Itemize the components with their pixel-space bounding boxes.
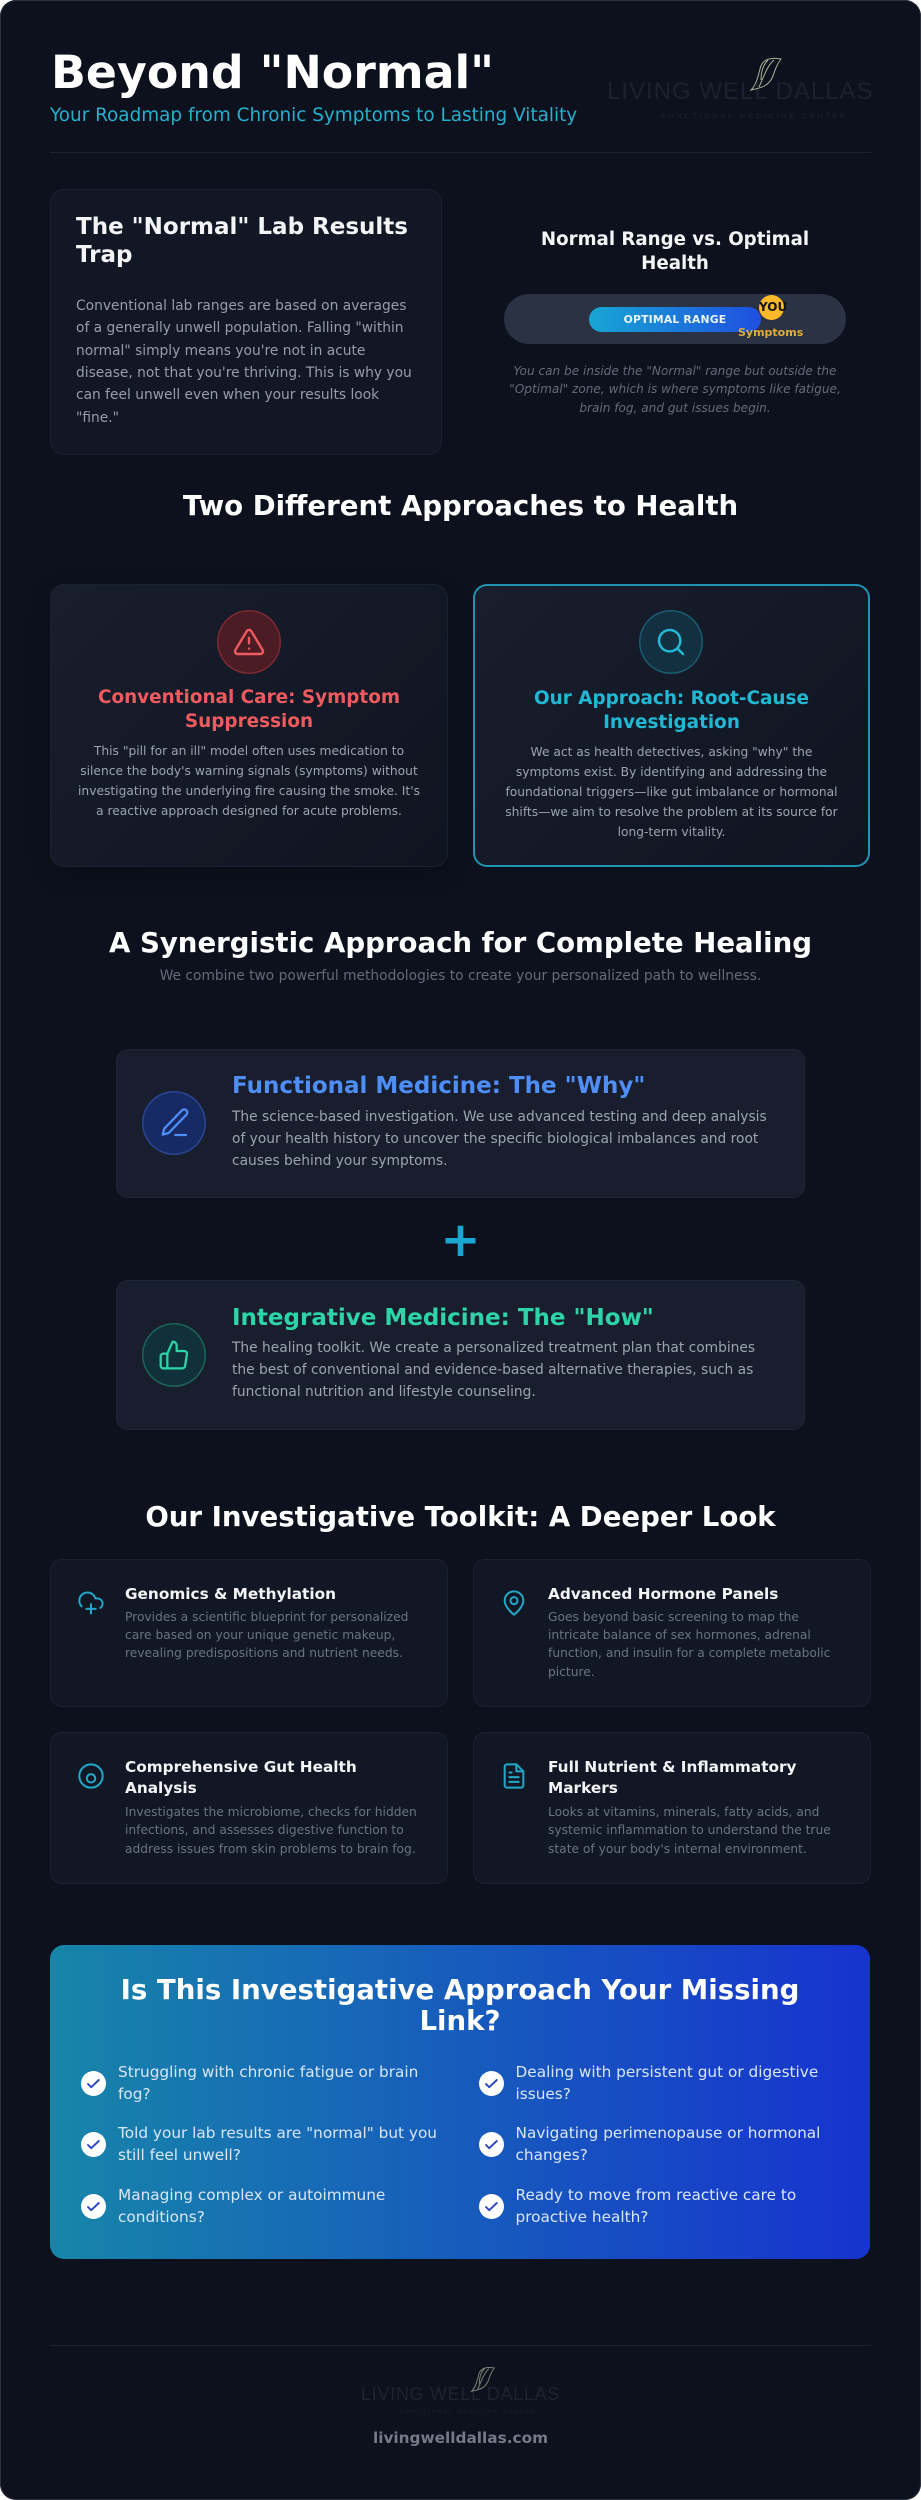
footer url: livingwelldallas.com bbox=[373, 2429, 548, 2447]
card text: revealing predispositions and nutrient needs. bbox=[125, 1646, 403, 1660]
card text: Goes beyond basic screening to map the bbox=[548, 1610, 799, 1624]
checklist item bbox=[81, 2124, 437, 2164]
panel: integrative medicine bbox=[116, 1280, 805, 1430]
panel body text: of a generally unwell population. Falling "within bbox=[76, 320, 404, 336]
heading: two approaches: Two Different Approaches to Health bbox=[183, 489, 738, 522]
card title: Comprehensive Gut Health bbox=[125, 1758, 357, 1776]
section title: A Synergistic Approach for Complete Healing bbox=[109, 926, 812, 959]
icon: target circle bbox=[78, 1763, 104, 1789]
icon: map pin bbox=[504, 1590, 524, 1616]
diagram caption: brain fog, and gut issues begin. bbox=[579, 401, 771, 415]
card text: Provides a scientific blueprint for personalized bbox=[125, 1610, 408, 1624]
panel body: functional nutrition and lifestyle counseling. bbox=[232, 1384, 536, 1400]
item text: Struggling with chronic fatigue or brain bbox=[118, 2063, 418, 2081]
panel body: causes behind your symptoms. bbox=[232, 1153, 448, 1169]
item text: Managing complex or autoimmune bbox=[118, 2186, 385, 2204]
panel heading: Trap bbox=[76, 242, 132, 268]
panel heading bbox=[76, 214, 408, 268]
card title bbox=[548, 1758, 797, 1797]
panel body text: Conventional lab ranges are based on averages bbox=[76, 298, 406, 314]
card text: function, and insulin for a complete metabolic bbox=[548, 1646, 830, 1660]
diagram caption: You can be inside the "Normal" range but outside the bbox=[514, 364, 836, 378]
panel: our approach bbox=[473, 584, 870, 867]
item text: changes? bbox=[516, 2146, 588, 2164]
card title: Genomics & Methylation bbox=[125, 1585, 336, 1603]
card body: a reactive approach designed for acute problems. bbox=[96, 804, 402, 818]
card heading: Suppression bbox=[185, 711, 313, 732]
card heading: Our Approach: Root-Cause bbox=[534, 688, 809, 709]
item text: issues? bbox=[516, 2085, 571, 2103]
card text: state of your body's internal environment. bbox=[548, 1842, 807, 1856]
item text: proactive health? bbox=[516, 2208, 648, 2226]
card body: investigating the underlying fire causing the smoke. It's bbox=[78, 784, 420, 798]
panel body bbox=[232, 1340, 755, 1400]
panel: normal vs optimal diagram bbox=[504, 228, 846, 415]
icon: check bbox=[479, 2071, 504, 2096]
panel: conventional care bbox=[50, 584, 448, 867]
card text: care based on your unique genetic makeup, bbox=[125, 1628, 395, 1642]
icon: magnifier bbox=[639, 610, 703, 674]
card text: systemic inflammation to understand the true bbox=[548, 1823, 831, 1837]
icon: leaf bbox=[749, 58, 782, 91]
checklist item bbox=[516, 2185, 856, 2229]
card text: Investigates the microbiome, checks for hidden bbox=[125, 1805, 417, 1819]
panel body text: "fine." bbox=[76, 410, 119, 426]
diagram heading bbox=[541, 228, 809, 274]
item text: fog? bbox=[118, 2085, 151, 2103]
checklist item bbox=[479, 2124, 820, 2164]
panel body: The healing toolkit. We create a personalized treatment plan that combines bbox=[232, 1340, 755, 1356]
icon: warning triangle bbox=[217, 610, 281, 674]
item text: Dealing with persistent gut or digestive bbox=[516, 2063, 818, 2081]
footer logo bbox=[360, 2368, 560, 2418]
card text: intricate balance of sex hormones, adrenal bbox=[548, 1628, 811, 1642]
card text: address issues from skin problems to brain fog. bbox=[125, 1842, 416, 1856]
panel heading: Integrative Medicine: The "How" bbox=[232, 1305, 654, 1331]
card title: Markers bbox=[548, 1779, 618, 1797]
header divider bbox=[50, 152, 871, 153]
card heading: Investigation bbox=[603, 712, 740, 733]
diagram caption: "Optimal" zone, which is where symptoms like fatigue, bbox=[509, 382, 841, 396]
header bbox=[50, 45, 874, 153]
item text bbox=[118, 2063, 418, 2103]
plus sign: + bbox=[440, 1212, 481, 1268]
icon: pen bbox=[142, 1091, 206, 1155]
checklist item bbox=[479, 2063, 818, 2103]
panel: functional medicine bbox=[116, 1049, 805, 1198]
logo tagline: FUNCTIONAL MEDICINE CENTER bbox=[661, 111, 848, 120]
icon: document bbox=[504, 1763, 524, 1789]
cta heading: Is This Investigative Approach Your Missing bbox=[121, 1973, 799, 2006]
diagram caption bbox=[509, 364, 841, 415]
card body: This "pill for an ill" model often uses medication to bbox=[94, 744, 404, 758]
card text bbox=[548, 1610, 830, 1679]
checklist item bbox=[81, 2186, 385, 2226]
card heading: Conventional Care: Symptom bbox=[98, 687, 400, 708]
icon: check bbox=[478, 2194, 504, 2218]
optimal range segment bbox=[589, 307, 761, 332]
icon: check bbox=[81, 2071, 106, 2096]
item text: Told your lab results are "normal" but you bbox=[118, 2124, 437, 2142]
panel body: of your health history to uncover the specific biological imbalances and root bbox=[232, 1131, 758, 1147]
heading: investigative toolkit: Our Investigative Toolkit: A Deeper Look bbox=[145, 1500, 776, 1533]
logo wordmark: LIVING WELL DALLAS bbox=[361, 2384, 560, 2404]
icon: thumbs up bbox=[142, 1323, 206, 1387]
card body: symptoms exist. By identifying and addressing the bbox=[516, 765, 827, 779]
footer bbox=[50, 2345, 871, 2451]
card title: Analysis bbox=[125, 1779, 197, 1797]
card text bbox=[125, 1805, 417, 1856]
icon: leaf bbox=[468, 2365, 498, 2395]
logo tagline: FUNCTIONAL MEDICINE CENTER bbox=[400, 2409, 537, 2415]
panel body text: can feel unwell even when your results look bbox=[76, 387, 379, 403]
item text bbox=[516, 2063, 818, 2103]
cta heading bbox=[121, 1973, 799, 2037]
card heading bbox=[98, 687, 400, 732]
panel body bbox=[232, 1109, 767, 1169]
card body bbox=[78, 744, 420, 818]
card title bbox=[125, 1758, 357, 1797]
icon: check bbox=[479, 2132, 504, 2157]
panel body text: disease, not that you're thriving. This is why you bbox=[76, 365, 412, 381]
card heading bbox=[534, 688, 809, 733]
item text bbox=[118, 2124, 437, 2164]
card body: We act as health detectives, asking "why" the bbox=[531, 745, 812, 759]
card title: Advanced Hormone Panels bbox=[548, 1585, 778, 1603]
subtitle: Your Roadmap from Chronic Symptoms to Lasting Vitality bbox=[50, 105, 577, 126]
title: Beyond "Normal" bbox=[51, 45, 494, 99]
card text bbox=[548, 1805, 831, 1856]
card body: silence the body's warning signals (symptoms) without bbox=[80, 764, 418, 778]
logo: Living Well Dallas bbox=[607, 58, 874, 120]
icon: cloud plus bbox=[78, 1592, 104, 1614]
item text bbox=[516, 2185, 796, 2228]
section subtitle: We combine two powerful methodologies to create your personalized path to wellness. bbox=[160, 968, 761, 984]
item text: Navigating perimenopause or hormonal bbox=[516, 2124, 820, 2142]
optimal range segment: OPTIMAL RANGE bbox=[624, 313, 726, 326]
item text bbox=[118, 2185, 385, 2228]
item text bbox=[516, 2124, 820, 2164]
panel body text: normal" simply means you're not in acute bbox=[76, 342, 365, 358]
icon: check bbox=[81, 2194, 106, 2219]
item text: still feel unwell? bbox=[118, 2146, 241, 2164]
card body: long-term vitality. bbox=[618, 825, 725, 839]
cta heading: Link? bbox=[419, 2004, 501, 2037]
card text bbox=[125, 1610, 408, 1660]
panel body: the best of conventional and evidence-based alternative therapies, such as bbox=[232, 1362, 753, 1378]
symptoms label: Symptoms bbox=[738, 326, 803, 339]
logo wordmark: LIVING WELL DALLAS bbox=[607, 78, 874, 105]
card text: picture. bbox=[548, 1665, 595, 1679]
card title: Full Nutrient & Inflammatory bbox=[548, 1758, 797, 1776]
toolkit card: nutrient markers bbox=[473, 1732, 871, 1884]
panel: call to action bbox=[50, 1945, 870, 2259]
diagram heading: Health bbox=[641, 253, 709, 274]
you marker: YOU bbox=[759, 300, 787, 314]
card body: shifts—we aim to resolve the problem at its source for bbox=[505, 805, 838, 819]
heading: synergistic approach bbox=[109, 926, 812, 984]
diagram heading: Normal Range vs. Optimal bbox=[541, 228, 809, 250]
checklist item bbox=[81, 2063, 418, 2103]
toolkit card: hormone panels bbox=[473, 1559, 871, 1707]
card body bbox=[505, 745, 838, 839]
card text: Looks at vitamins, minerals, fatty acids, and bbox=[548, 1805, 819, 1819]
card text: infections, and assesses digestive function to bbox=[125, 1823, 404, 1837]
panel body text bbox=[76, 298, 412, 426]
item text: Ready to move from reactive care to bbox=[516, 2186, 796, 2204]
panel heading: The "Normal" Lab Results bbox=[76, 214, 408, 240]
panel body: The science-based investigation. We use advanced testing and deep analysis bbox=[232, 1109, 767, 1125]
you marker bbox=[759, 295, 784, 320]
panel: normal lab results trap bbox=[50, 189, 442, 455]
item text: conditions? bbox=[118, 2208, 205, 2226]
panel heading: Functional Medicine: The "Why" bbox=[232, 1073, 645, 1099]
toolkit card: genomics bbox=[50, 1559, 448, 1707]
icon: check bbox=[81, 2132, 106, 2157]
range bar bbox=[504, 294, 846, 344]
toolkit card: gut health bbox=[50, 1732, 448, 1884]
card body: foundational triggers—like gut imbalance or hormonal bbox=[505, 785, 838, 799]
